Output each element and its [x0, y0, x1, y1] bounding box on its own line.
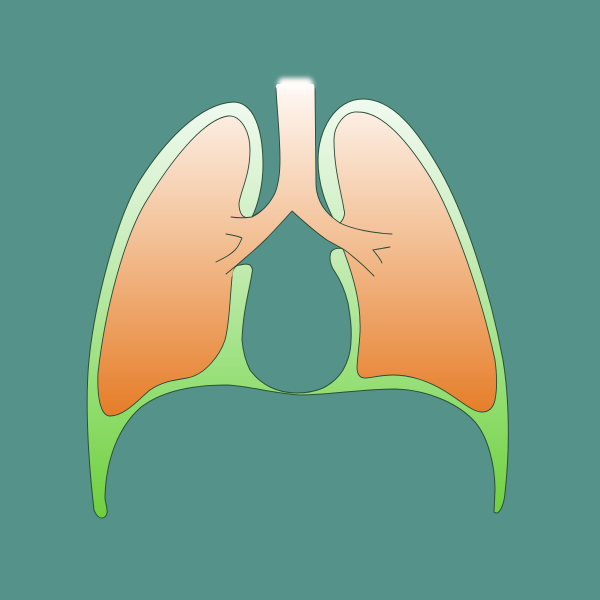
trachea left edge and left main bronchus top	[231, 88, 280, 218]
right bronchial branch	[373, 247, 390, 263]
right lung outline	[334, 112, 496, 412]
trachea blurred top	[278, 78, 313, 91]
left lung outline	[98, 116, 250, 416]
bronchi lower edges	[226, 211, 374, 276]
lung and airway outlines	[98, 88, 496, 416]
left bronchial branch	[216, 234, 242, 262]
trachea right edge and right main bronchus top	[315, 88, 392, 234]
lungs and airway fill	[98, 84, 496, 416]
pleura: green outer membrane	[87, 99, 508, 518]
